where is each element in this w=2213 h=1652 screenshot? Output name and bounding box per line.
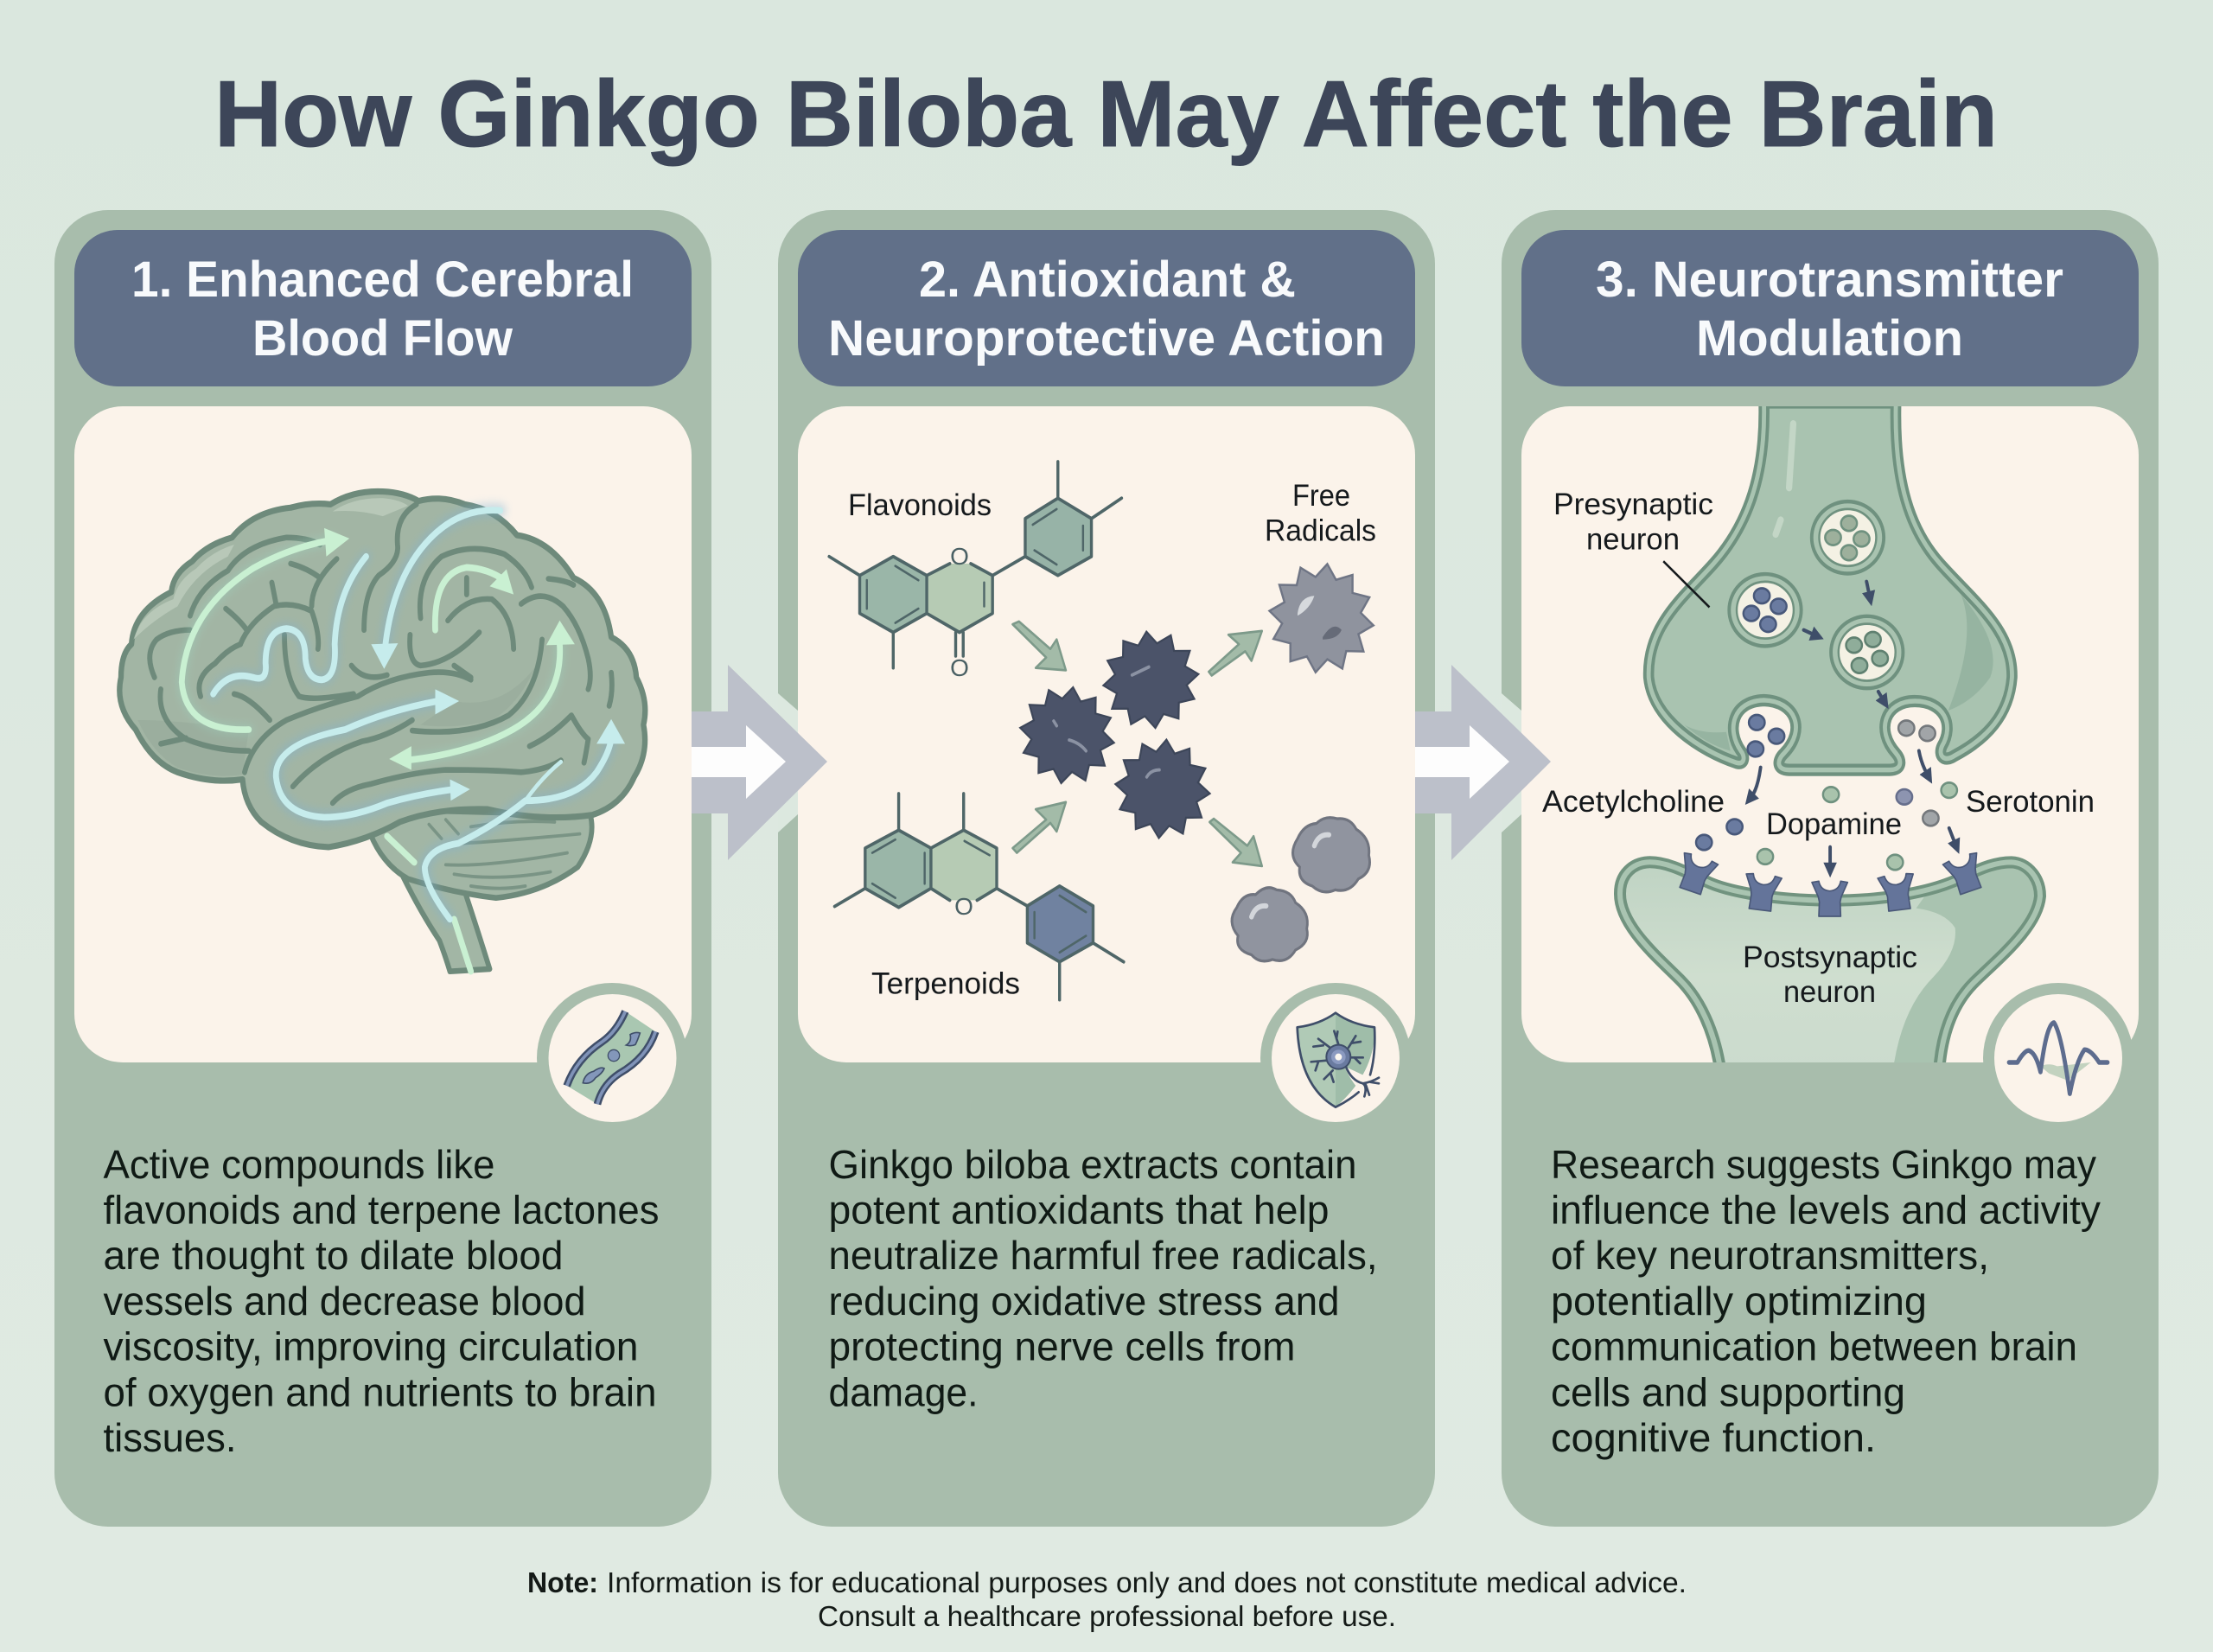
text: panel 3 description: of key neurotransmitters, — [1551, 1233, 1989, 1278]
illustration: molecules and free radicals — [829, 462, 1380, 1001]
labels: molecules: Free — [1292, 479, 1350, 513]
text: panel 3 description: cognitive function. — [1551, 1415, 1876, 1460]
heading: panel 1: Blood Flow — [252, 310, 513, 367]
pointer line — [1663, 561, 1710, 607]
blood flow glow — [182, 510, 611, 919]
postsynaptic neuron — [1620, 845, 2069, 1069]
flow arrow: brain stem rising — [387, 719, 625, 972]
panel: enhanced cerebral blood flow — [54, 210, 711, 1527]
labels: synapse: Acetylcholine — [1542, 785, 1725, 819]
text: panel 1 description: tissues. — [104, 1415, 237, 1460]
title: How Ginkgo Biloba May Affect the Brain — [214, 61, 1998, 167]
text: panel 2 description: reducing oxidative stress and — [828, 1279, 1340, 1324]
labels: synapse: Presynaptic — [1553, 488, 1713, 521]
arrows: reaction direction — [1012, 622, 1262, 866]
text: panel 3 description: potentially optimizing — [1551, 1279, 1927, 1324]
labels: synapse: Postsynaptic — [1743, 941, 1917, 974]
heading: panel 1 — [74, 230, 692, 386]
cerebellum — [370, 810, 592, 898]
text: panel 1 description — [104, 1142, 659, 1460]
text: panel 2 description: neutralize harmful free radicals, — [828, 1233, 1378, 1278]
labels: molecules: Terpenoids — [871, 966, 1020, 1001]
text: panel 3 description: communication between brain — [1551, 1324, 2077, 1369]
text: panel 2 description: damage. — [828, 1369, 979, 1414]
text: panel 1 description: Active compounds like — [104, 1142, 494, 1187]
cerebrum outline — [119, 491, 645, 847]
footer note: Information is for educational purposes only and does not constitute medical advice. — [607, 1566, 1687, 1598]
text: panel 3 description: cells and supporting — [1551, 1369, 1905, 1414]
radical: lighter damaged — [1264, 557, 1380, 679]
labels: synapse: Serotonin — [1966, 785, 2095, 819]
arrow: panel 1 to panel 2 — [692, 665, 827, 860]
labels: synapse: Dopamine — [1766, 807, 1902, 841]
heading: panel 1: 1. Enhanced Cerebral — [131, 252, 634, 308]
illustration: synapse — [1620, 402, 2069, 1069]
brain folds — [150, 504, 612, 803]
text: panel 2 description: protecting nerve cells from — [828, 1324, 1295, 1369]
atom labels: O — [954, 893, 973, 920]
radicals: dark spiky — [1014, 626, 1214, 843]
heading: panel 2: Neuroprotective Action — [828, 310, 1385, 367]
labels: molecules: Flavonoids — [848, 488, 992, 522]
flow arrow: temporal lobe — [276, 689, 470, 817]
brain stem — [403, 877, 490, 972]
atom labels — [950, 543, 973, 920]
neurotransmitter molecules — [1696, 715, 1957, 870]
labels: molecules — [848, 479, 1376, 1001]
heading: panel 3: 3. Neurotransmitter — [1596, 252, 2063, 308]
panel: neurotransmitter modulation — [1502, 210, 2159, 1527]
flow arrow: parietal loop — [435, 567, 513, 630]
flow arrow: frontal lobe — [182, 528, 349, 730]
molecule: flavonoid — [829, 462, 1121, 668]
heading: panel 3 — [1521, 230, 2139, 386]
text: panel 3 description: Research suggests Ginkgo may — [1551, 1142, 2096, 1187]
heading: panel 2: 2. Antioxidant & — [919, 252, 1296, 308]
atom labels: O — [950, 654, 969, 681]
synaptic vesicles — [1729, 501, 1903, 688]
footer note — [527, 1566, 1687, 1632]
text: panel 1 description: are thought to dilate blood — [104, 1233, 564, 1278]
atom labels: O — [950, 543, 969, 570]
arrow: panel 2 to panel 3 — [1415, 665, 1551, 860]
labels: synapse: neuron — [1586, 522, 1680, 557]
receptors — [1674, 852, 1987, 916]
labels: synapse — [1542, 488, 2095, 1009]
labels: synapse: neuron — [1783, 975, 1876, 1009]
text: panel 2 description — [828, 1142, 1378, 1414]
icon: blood vessel — [537, 983, 687, 1133]
icon: neural signal waveform — [1983, 983, 2133, 1133]
heading: panel 2 — [798, 230, 1415, 386]
text: panel 3 description: influence the levels and activity — [1551, 1188, 2101, 1233]
text: panel 1 description: viscosity, improving circulation — [104, 1324, 638, 1369]
text: panel 2 description: Ginkgo biloba extracts contain — [828, 1142, 1357, 1187]
flow arrow: occipital sweep — [389, 621, 575, 770]
labels: molecules: Radicals — [1265, 513, 1376, 548]
text: panel 2 description: potent antioxidants that help — [828, 1188, 1330, 1233]
illustration: brain with blood flow arrows — [119, 491, 645, 972]
presynaptic neuron — [1649, 402, 2012, 770]
arrows: release direction — [1751, 582, 1955, 867]
heading: panel 3: Modulation — [1696, 310, 1963, 367]
flow: winding vessel — [214, 557, 367, 694]
footer note: Consult a healthcare professional before use. — [818, 1600, 1396, 1632]
footer note: Note: — [527, 1566, 598, 1598]
text: panel 3 description — [1551, 1142, 2101, 1460]
panel: antioxidant and neuroprotective action — [778, 210, 1435, 1527]
icon: shield with neuron — [1260, 983, 1411, 1133]
flow arrow: central descending — [371, 510, 501, 669]
molecule: terpenoid — [834, 794, 1124, 1000]
text: panel 1 description: vessels and decrease blood — [104, 1279, 586, 1324]
text: panel 1 description: of oxygen and nutrients to brain — [104, 1369, 657, 1414]
neutralized molecules — [1232, 818, 1370, 961]
text: panel 1 description: flavonoids and terpene lactones — [104, 1188, 659, 1233]
